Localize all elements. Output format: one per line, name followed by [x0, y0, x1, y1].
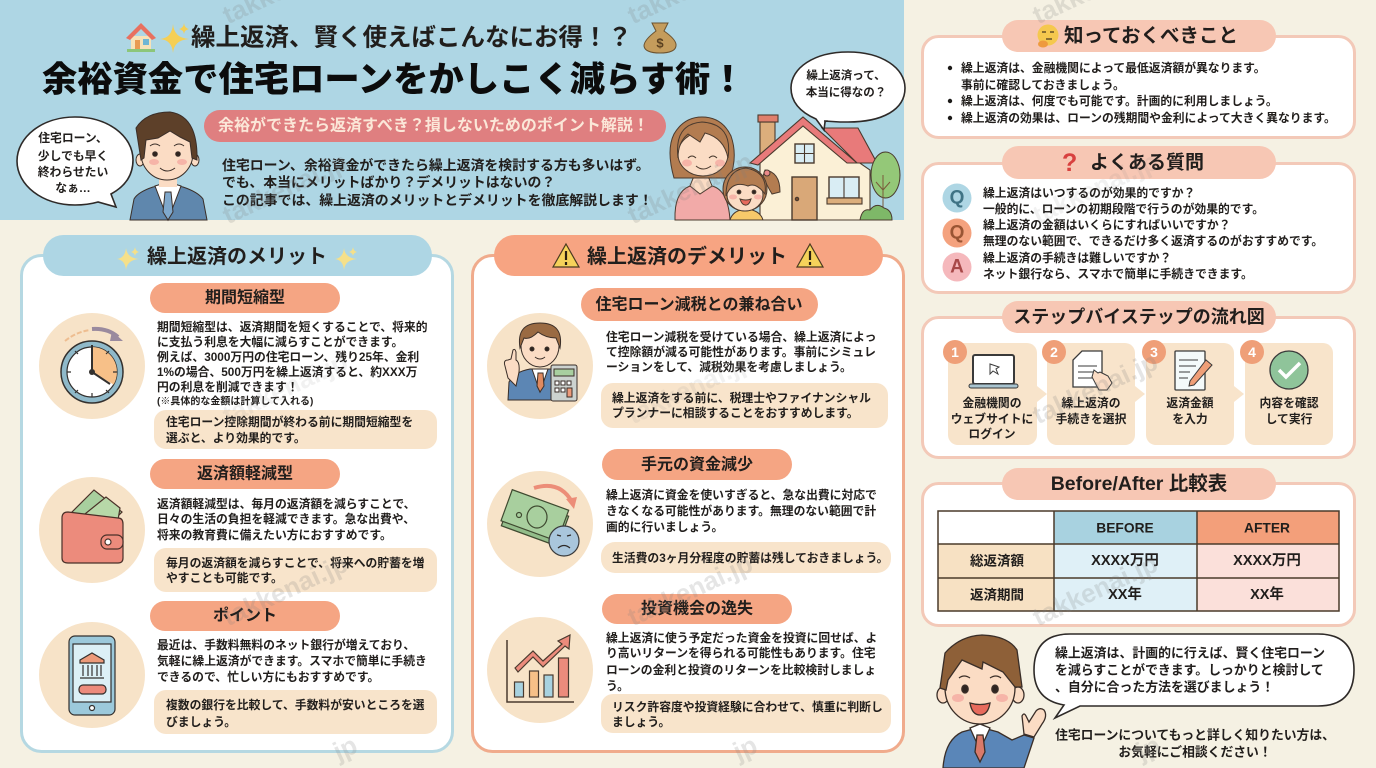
comparison table: AFTER: [1244, 520, 1290, 536]
speech bubble: left: 住宅ローン、: [38, 131, 108, 145]
subtitle pill: 余裕ができたら返済すべき？損しないためのポイント解説！: [218, 116, 649, 134]
illustration: man in suit: [130, 112, 207, 220]
icon: wallet: [39, 477, 145, 583]
text: payment reduction: [157, 497, 415, 542]
heading: FAQ: [1002, 146, 1276, 179]
speech bubble: closing message: 繰上返済は、計画的に行えば、賢く住宅ローン: [1055, 646, 1325, 660]
FAQ text: 繰上返済の金額はいくらにすればいいですか？: [983, 218, 1230, 232]
heading: things to know: [1002, 20, 1276, 52]
note: tax deduction: プランナーに相談することをおすすめします。: [612, 406, 859, 420]
comparison table: BEFORE: [1096, 520, 1154, 536]
bullet list: 繰上返済の効果は、ローンの残期間や金利によって大きく異なります。: [961, 111, 1336, 125]
speech bubble: closing message: [1034, 634, 1354, 718]
watermarks: takkenai.jp: [623, 146, 757, 230]
subtitle pill: [204, 110, 666, 142]
speech bubble: left: 少しでも早く: [38, 149, 108, 163]
text: reduced funds: きなくなる可能性があります。無理のない範囲で計: [606, 504, 876, 518]
step 3: [1142, 340, 1244, 445]
text: tax deduction: [606, 330, 876, 374]
heading: before/after: [1002, 468, 1276, 500]
text: term reduction: 円の利息を削減できます！: [157, 380, 299, 394]
text: term reduction: に支払う利息を大幅に減らすことができます。: [157, 335, 403, 349]
step 3: 3: [1150, 344, 1158, 360]
panel: step by step: [922, 301, 1354, 458]
text: term reduction: 1%の場合、500万円を繰上返済すると、約XXX万: [157, 365, 418, 379]
step 4: して実行: [1266, 412, 1313, 426]
comparison table: XXXX万円: [1233, 553, 1301, 569]
text: term reduction: [157, 320, 428, 408]
icons: Q and A badges: A: [950, 256, 964, 278]
sub-heading: lost investment: [602, 594, 792, 624]
note: payment reduction: [154, 548, 437, 592]
heading: merits: 繰上返済のメリット: [147, 245, 327, 268]
sub-heading: tax deduction: [581, 288, 818, 321]
FAQ text: 無理のない範囲で、できるだけ多く返済するのがおすすめです。: [983, 234, 1323, 248]
note: tax deduction: [601, 383, 888, 428]
icons: Q and A badges: [942, 184, 972, 282]
text: lost investment: [606, 631, 877, 693]
note: lost investment: ましょう。: [612, 715, 670, 729]
watermarks: [218, 0, 1165, 767]
heading: things to know: 知っておくべきこと: [1064, 25, 1238, 47]
illustration: waving man: [937, 635, 1046, 768]
icons: Q and A badges: Q: [950, 222, 964, 244]
text: point: できるので、忙しい方にもおすすめです。: [157, 670, 379, 684]
note: tax deduction: 繰上返済をする前に、税理士やファイナンシャル: [612, 391, 871, 405]
intro text: [222, 157, 653, 208]
icon: sparkles emoji: [160, 23, 189, 53]
watermarks: takkenai.jp: [1028, 346, 1162, 430]
speech bubble: right: [791, 52, 905, 130]
note: lost investment: リスク許容度や投資経験に合わせて、慎重に判断し: [612, 700, 883, 714]
sub-heading: payment reduction: 返済額軽減型: [197, 464, 293, 482]
bullet list: [948, 61, 1336, 125]
step 2: 繰上返済の: [1062, 396, 1120, 410]
text: tax deduction: て控除額が減る可能性があります。事前にシミュレ: [606, 345, 876, 359]
speech bubble: closing message: を減らすことができます。しっかりと検討して: [1055, 662, 1324, 678]
sub-heading: reduced funds: 手元の資金減少: [641, 454, 753, 474]
watermarks: takkenai.jp: [623, 346, 757, 430]
text: tax deduction: ーションをして、減税効果を考慮しましょう。: [606, 360, 852, 374]
bullet list: 事前に確認しておきましょう。: [961, 78, 1125, 92]
text: reduced funds: 画的に行いましょう。: [606, 520, 723, 534]
note: term reduction: 住宅ローン控除期間が終わる前に期間短縮型を: [166, 415, 413, 429]
heading: steps: ステップバイステップの流れ図: [1013, 307, 1265, 327]
step 1: 1: [951, 344, 959, 360]
icon: clock: [39, 313, 145, 419]
text: term reduction: 例えば、3000万円の住宅ローン、残り25年、金利: [157, 350, 419, 364]
text: reduced funds: [606, 488, 877, 534]
text: lost investment: り高いリターンを得られる可能性もあります。住宅: [606, 646, 876, 660]
watermarks: jp: [727, 730, 762, 767]
text: payment reduction: 将来の教育費に備えたい方におすすめです。: [157, 528, 392, 542]
main title: 余裕資金で住宅ローンをかしこく減らす術！: [42, 60, 745, 100]
sub-heading: reduced funds: [602, 449, 792, 480]
panel: merits: [22, 235, 452, 752]
speech bubble: closing message: 、自分に合った方法を選びましょう！: [1055, 680, 1274, 694]
comparison table: 総返済額: [970, 552, 1024, 568]
watermarks: takkenai.jp: [218, 146, 352, 230]
icon: money bag: $: [656, 36, 664, 50]
speech bubble: left: 終わらせたい: [38, 165, 108, 179]
text: payment reduction: 日々の生活の負担を軽減できます。急な出費や、: [157, 512, 415, 526]
closing text: [1055, 728, 1335, 760]
text: lost investment: ローンの金利と投資のリターンを比較検討しましょ: [606, 663, 876, 677]
step 4: 内容を確認: [1260, 396, 1319, 410]
comparison table: 返済期間: [970, 588, 1024, 602]
note: point: びましょう。: [166, 715, 236, 729]
FAQ text: 繰上返済の手続きは難しいですか？: [983, 251, 1171, 265]
sub-heading: payment reduction: [150, 459, 340, 489]
step 1: ログイン: [968, 427, 1016, 441]
text: tax deduction: 住宅ローン減税を受けている場合、繰上返済によっ: [606, 330, 876, 344]
watermarks: jp: [327, 730, 362, 767]
sub-heading: point: ポイント: [213, 606, 277, 624]
heading: steps: [1002, 301, 1276, 333]
step 3: を入力: [1172, 412, 1208, 426]
heading: merits: [43, 235, 432, 276]
watermarks: takkenai.jp: [1028, 548, 1162, 632]
note: payment reduction: やすことも可能です。: [166, 571, 283, 585]
speech bubble: left: なぁ…: [55, 181, 91, 195]
note: point: [154, 690, 437, 734]
heading: before/after: Before/After 比較表: [1051, 472, 1228, 495]
text: term reduction: 期間短縮型は、返済期間を短くすることで、将来的: [157, 320, 428, 334]
icon: house emoji: [126, 23, 156, 52]
sub-heading: term reduction: 期間短縮型: [205, 288, 285, 306]
illustration: mother: [670, 117, 734, 220]
step 1: 金融機関の: [962, 396, 1022, 410]
sub-heading: tax deduction: 住宅ローン減税との兼ね合い: [595, 294, 803, 314]
icon: man with calculator: [487, 313, 593, 419]
step 4: [1240, 340, 1333, 445]
intro text: この記事では、繰上返済のメリットとデメリットを徹底解説します！: [222, 192, 653, 208]
panel: FAQ: [922, 146, 1354, 292]
closing text: 住宅ローンについてもっと詳しく知りたい方は、: [1055, 728, 1335, 742]
FAQ text: 一般的に、ローンの初期段階で行うのが効果的です。: [983, 202, 1264, 216]
speech bubble: right: 繰上返済って、: [806, 68, 886, 82]
note: term reduction: [154, 410, 437, 449]
watermarks: takkenai.jp: [218, 548, 352, 632]
intro text: 住宅ローン、余裕資金ができたら繰上返済を検討する方も多いはず。: [222, 157, 650, 173]
note: payment reduction: 毎月の返済額を減らすことで、将来への貯蓄を増: [166, 556, 425, 570]
subtitle: 繰上返済、賢く使えばこんなにお得！？: [191, 24, 632, 52]
text: payment reduction: 返済額軽減型は、毎月の返済額を減らすことで、: [157, 497, 415, 511]
illustration: house: [750, 115, 877, 220]
speech bubble: right: 本当に得なの？: [806, 85, 886, 99]
step 3: 返済金額: [1166, 396, 1214, 410]
FAQ text: ネット銀行なら、スマホで簡単に手続きできます。: [983, 267, 1253, 281]
heading: demerits: [494, 235, 883, 276]
illustration: tree: [860, 152, 900, 220]
step 2: 2: [1050, 344, 1058, 360]
illustration: daughter: [723, 167, 780, 220]
watermarks: takkenai.jp: [218, 346, 352, 430]
heading: demerits: 繰上返済のデメリット: [587, 244, 787, 268]
heading: FAQ: ?: [1062, 149, 1077, 177]
speech bubble: left: [17, 117, 133, 207]
header banner: [0, 0, 905, 220]
text: lost investment: 繰上返済に使う予定だった資金を投資に回せば、よ: [606, 631, 877, 645]
sub-heading: lost investment: 投資機会の逸失: [641, 598, 753, 618]
note: point: 複数の銀行を比較して、手数料が安いところを選: [166, 698, 425, 712]
panel: things to know: [922, 20, 1354, 138]
text: reduced funds: 繰上返済に資金を使いすぎると、急な出費に対応で: [606, 488, 877, 502]
comparison table: XXXX万円: [1091, 553, 1159, 569]
text: point: 気軽に繰上返済ができます。スマホで簡単に手続き: [157, 654, 427, 668]
step 1: [943, 340, 1047, 445]
text: point: [157, 638, 427, 684]
icons: Q and A badges: Q: [950, 188, 964, 208]
note: lost investment: [601, 694, 891, 733]
panel: before/after table: [922, 468, 1354, 626]
heading: FAQ: よくある質問: [1090, 152, 1204, 174]
bullet list: 繰上返済は、金融機関によって最低返済額が異なります。: [961, 61, 1266, 75]
note: reduced funds: [601, 542, 891, 573]
FAQ text: [983, 186, 1323, 281]
comparison table: XX年: [1250, 585, 1284, 603]
icon: money with worried face: [487, 471, 593, 577]
text: lost investment: う。: [606, 679, 629, 693]
watermarks: takkenai.jp: [623, 548, 757, 632]
intro text: でも、本当にメリットばかり？デメリットはないの？: [222, 174, 555, 190]
step 2: [1042, 340, 1145, 445]
note: term reduction: 選ぶと、より効果的です。: [166, 431, 306, 445]
icon: rising chart: [487, 617, 593, 723]
watermarks: jp: [1130, 730, 1165, 767]
text: point: 最近は、手数料無料のネット銀行が増えており、: [157, 638, 415, 652]
closing text: お気軽にご相談ください！: [1118, 744, 1272, 760]
step 4: 4: [1248, 344, 1256, 360]
comparison table: XX年: [1108, 585, 1142, 603]
bullet list: 繰上返済は、何度でも可能です。計画的に利用しましょう。: [961, 94, 1278, 108]
comparison table: [938, 511, 1339, 611]
note: reduced funds: 生活費の3ヶ月分程度の貯蓄は残しておきましょう。: [612, 551, 888, 565]
sub-heading: point: [150, 601, 340, 631]
watermarks: takkenai.jp: [1028, 146, 1162, 230]
panel: demerits: [472, 235, 904, 752]
FAQ text: 繰上返済はいつするのが効果的ですか？: [983, 186, 1195, 200]
step 2: 手続きを選択: [1056, 412, 1127, 426]
step 1: ウェブサイトに: [951, 412, 1033, 426]
icon: money bag: [644, 23, 676, 53]
sub-heading: term reduction: [150, 283, 340, 313]
text: term reduction: (※具体的な金額は計算して入れる): [157, 394, 313, 408]
icon: smartphone bank: [39, 622, 145, 728]
